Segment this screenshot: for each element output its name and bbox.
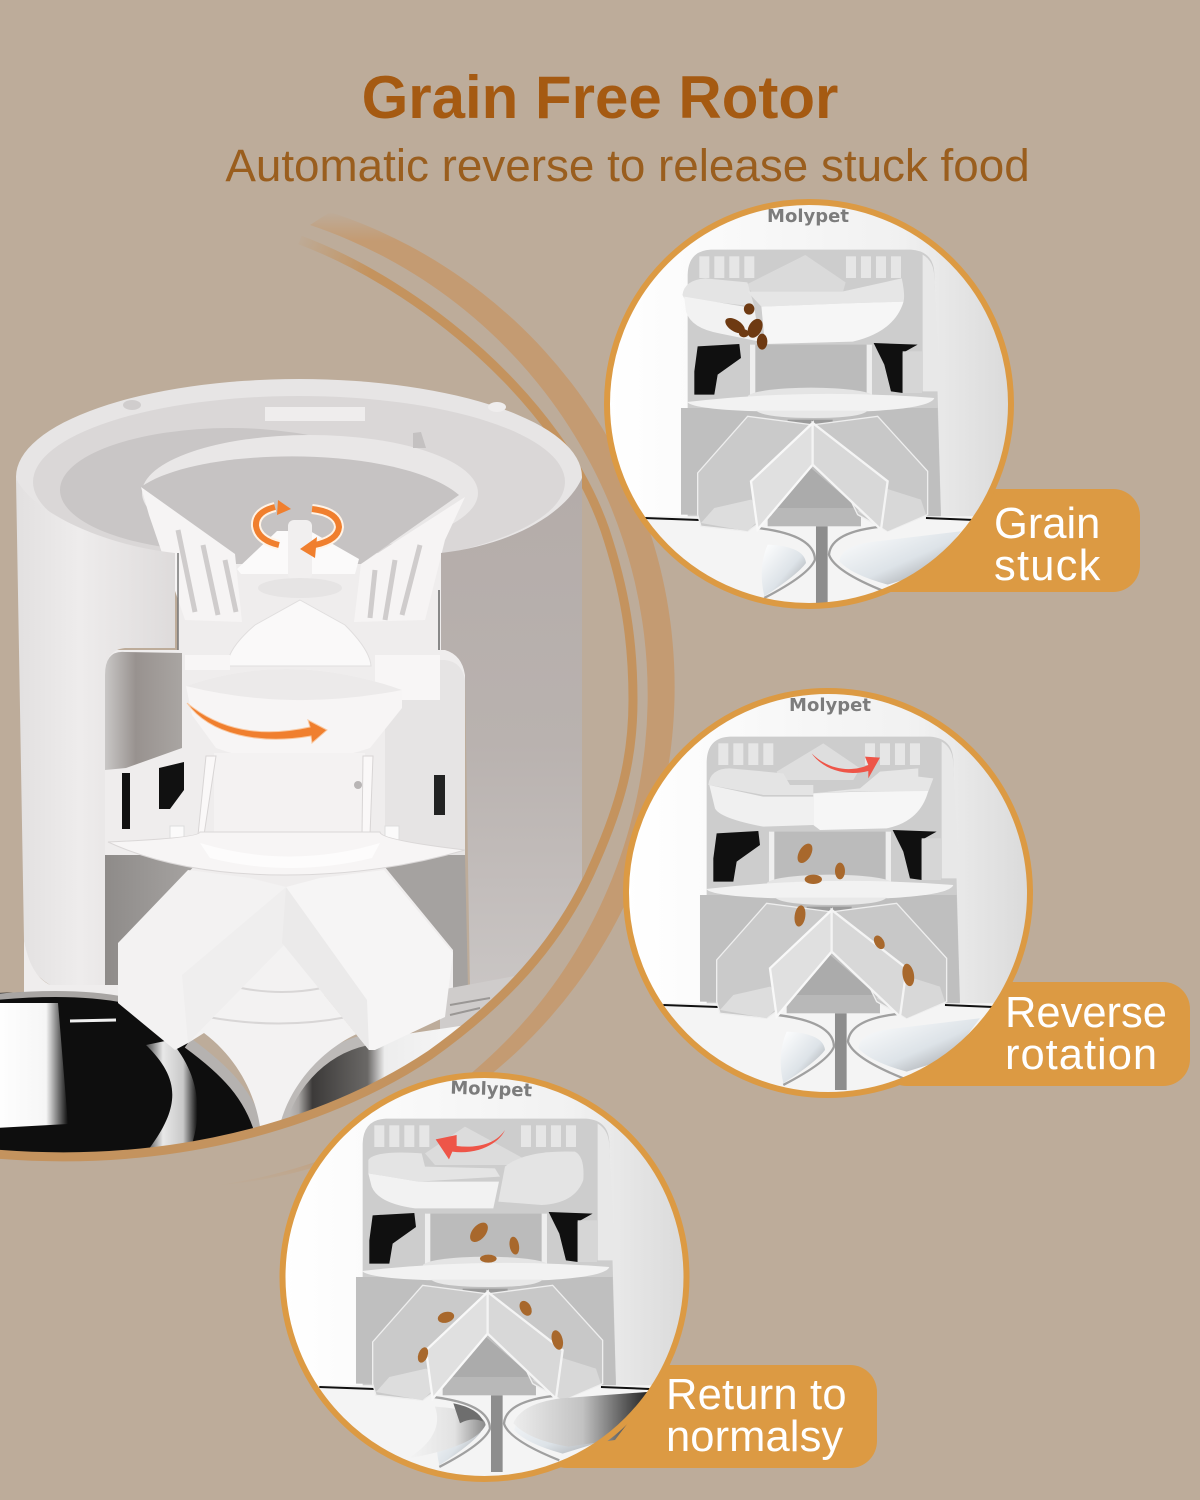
rotor tray with stuck grain <box>682 255 904 350</box>
decorative arc: thin band upper <box>300 240 633 700</box>
label pill: return to normalsy <box>540 1365 877 1468</box>
lower wall left <box>105 855 192 985</box>
rotor hub <box>237 520 359 598</box>
decorative arc: outer band <box>210 212 675 1186</box>
title: Grain Free Rotor <box>362 64 838 131</box>
right base ring <box>440 984 496 1029</box>
rotor tray and kibble <box>708 743 933 987</box>
right body wall <box>441 478 582 1010</box>
arrow: counter-clockwise <box>436 1130 505 1159</box>
inset illustration <box>276 1073 693 1480</box>
right bowl <box>282 1026 461 1120</box>
left body wall <box>16 478 175 985</box>
ring <box>626 691 1030 1095</box>
label pill: grain stuck <box>840 489 1140 592</box>
lower wall right <box>386 855 468 988</box>
product cutaway illustration <box>0 379 600 1175</box>
label text: grain stuck: Grain <box>994 500 1100 548</box>
ring <box>282 1075 686 1479</box>
icon: orange rotation arrow <box>187 703 327 743</box>
label text: reverse rotation: rotation <box>1005 1031 1158 1079</box>
decorative arc: thin band lower <box>0 700 633 1157</box>
window right interior <box>385 660 465 860</box>
funnel interior <box>141 456 459 564</box>
chrome bowl reflections <box>408 1392 652 1458</box>
left chute <box>118 870 190 1050</box>
ring <box>607 202 1011 606</box>
funnel ribs left <box>141 487 242 622</box>
lower cylinder <box>170 753 399 844</box>
mounting plate <box>108 832 465 875</box>
label text: return to normalsy: normalsy <box>666 1413 843 1461</box>
funnel ribs right <box>354 497 465 622</box>
right chute <box>325 988 448 1050</box>
cylinder rim <box>16 379 582 553</box>
left bowl <box>0 991 260 1152</box>
label text: reverse rotation: Reverse <box>1005 989 1167 1037</box>
subtitle: Automatic reverse to release stuck food <box>225 140 1030 191</box>
center column <box>188 988 368 1126</box>
brand name: Molypet <box>789 695 871 716</box>
cone <box>227 600 371 666</box>
chute shading <box>182 887 369 1050</box>
label text: return to normalsy: Return to <box>666 1371 847 1419</box>
mid supports <box>185 655 440 700</box>
rotor tray and kibble <box>368 1127 584 1364</box>
brand name: Molypet <box>767 206 849 227</box>
cavity backing <box>105 553 465 995</box>
panel: grain stuck inset <box>601 202 1018 611</box>
label text: grain stuck: stuck <box>994 542 1102 590</box>
inset illustration <box>601 204 1018 611</box>
inset illustration <box>620 691 1037 1098</box>
panel: return to normalsy inset <box>276 1073 693 1480</box>
icon: orange circular arrows <box>256 500 339 558</box>
left base <box>24 940 118 1000</box>
label pill: reverse rotation <box>880 982 1190 1086</box>
brand name: Molypet <box>450 1078 533 1101</box>
kibble <box>416 1219 565 1364</box>
rotor tray <box>375 682 402 729</box>
kibble <box>793 841 916 987</box>
window left grey panel <box>105 652 182 770</box>
arrow: clockwise <box>812 753 880 778</box>
panel: reverse rotation inset <box>620 691 1037 1098</box>
